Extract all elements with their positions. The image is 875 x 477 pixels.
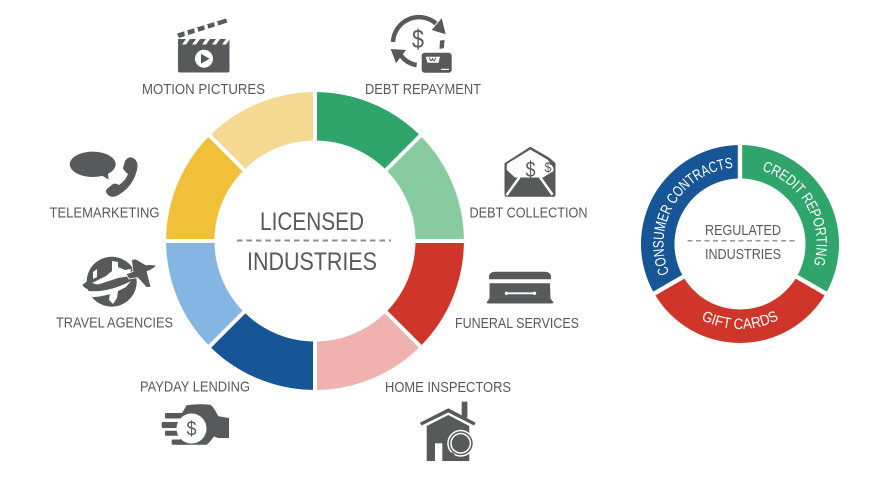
icon: debt repayment arrows and card [391,17,452,73]
segment: debt repayment [315,92,420,170]
icon: casket [487,272,554,304]
segment: credit reporting [742,145,839,292]
icon: film clapperboard [177,18,230,72]
segment: payday lending [210,312,315,390]
donut chart: regulated industries [641,145,839,343]
label: home inspectors: HOME INSPECTORS [385,380,511,396]
icon: house with magnifier [420,402,476,461]
icon: globe with airplane [82,257,157,307]
label: debt collection: DEBT COLLECTION [470,205,588,221]
donut chart: licensed industries [162,88,468,394]
label: telemarketing: TELEMARKETING [50,205,160,221]
segment: credit reporting: CREDIT REPORTING [764,162,827,266]
center text: licensed industries: LICENSED [260,208,364,236]
segment: debt collection [386,136,464,241]
icon: hand holding coin: $ [186,418,196,440]
center text: regulated industries: REGULATED [705,222,781,239]
icon: hand holding coin [162,404,229,445]
label: debt repayment: DEBT REPAYMENT [365,82,481,98]
center text: licensed industries: INDUSTRIES [247,248,377,276]
center text: regulated industries: INDUSTRIES [705,246,781,263]
center text: licensed industries [237,208,391,276]
segment: gift cards [656,278,824,343]
segment: motion pictures [210,92,315,170]
segment: gift cards: GIFT CARDS [702,311,778,330]
icon: speech bubble and telephone [70,152,138,197]
segment: telemarketing [166,136,244,241]
icon: debt collection envelope [504,147,556,197]
icon: debt repayment arrows and card: $ [412,24,424,54]
label: funeral services: FUNERAL SERVICES [455,316,579,332]
label: travel agencies: TRAVEL AGENCIES [56,315,173,331]
label: payday lending: PAYDAY LENDING [140,380,250,396]
segment: travel agencies [166,241,244,346]
icon: debt collection envelope: $ [544,159,552,175]
label: motion pictures: MOTION PICTURES [142,82,265,98]
segment: consumer contracts: CONSUMER CONTRACTS [653,158,732,275]
icon: debt collection envelope: $ [526,157,536,182]
segment: funeral services [386,241,464,346]
center text: regulated industries [688,222,796,263]
segment: home inspectors [315,312,420,390]
